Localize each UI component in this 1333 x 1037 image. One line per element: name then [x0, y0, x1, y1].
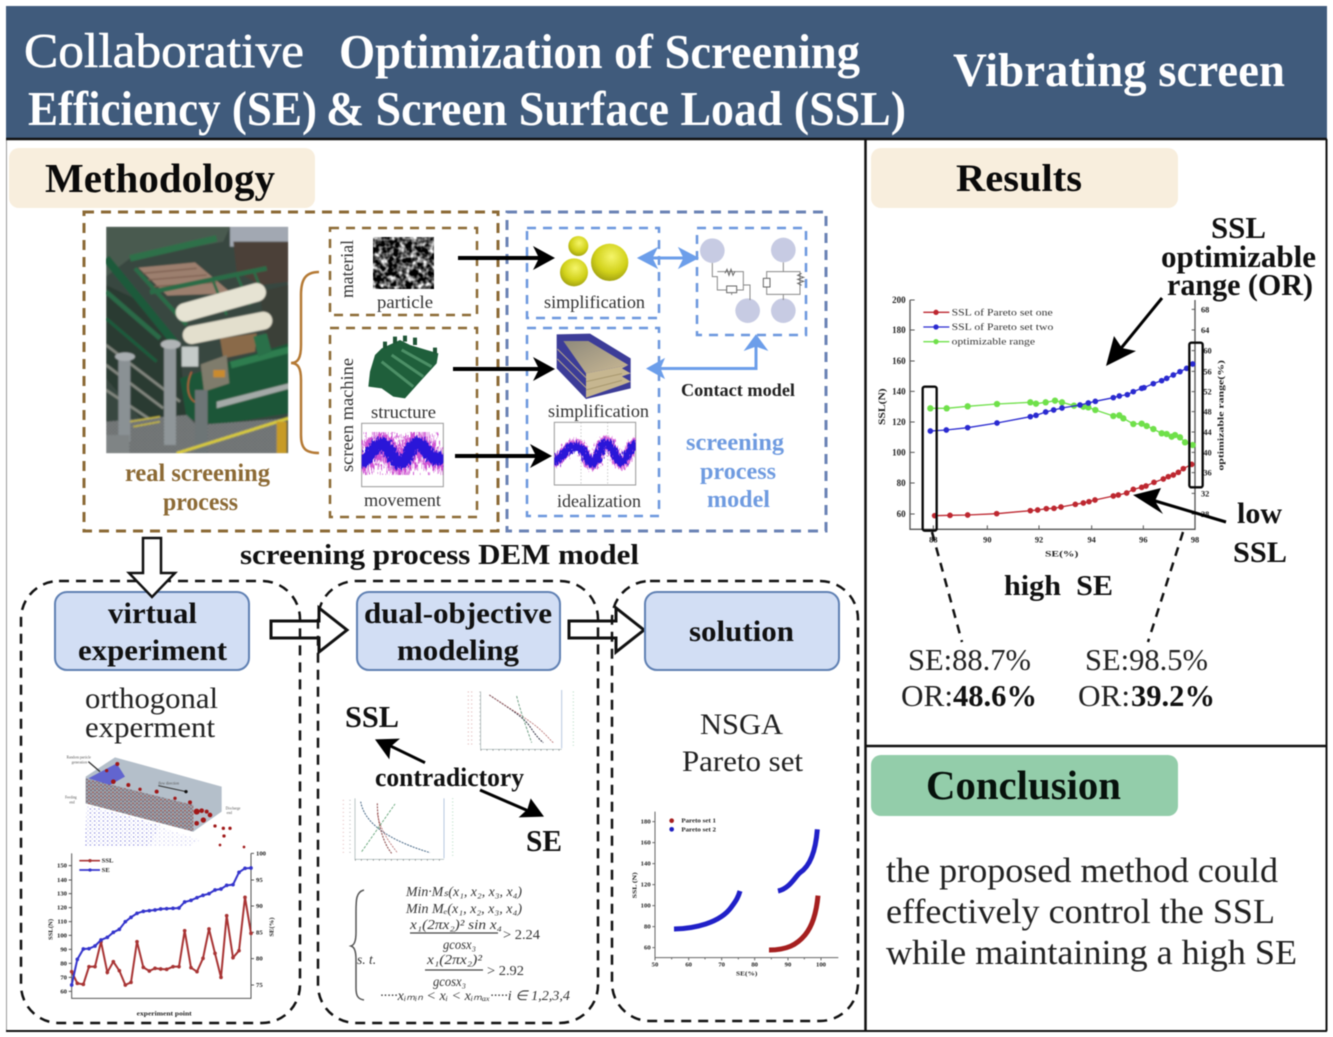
chart: SSL and optimizable range vs SE: 28 [1201, 510, 1209, 519]
heading box: dual-objective modeling: modeling [397, 634, 519, 667]
image: DEM simulation: Feeding [65, 796, 77, 800]
text: conclusion [886, 851, 1297, 972]
box: machine simplification and idealization: idealization [557, 491, 641, 511]
chart: Pareto sets: 80 [644, 924, 651, 931]
chart: SSL and optimizable range vs SE: 32 [1201, 489, 1209, 498]
chart: Pareto sets: 160 [641, 840, 651, 847]
label: contradictory: contradictory [375, 763, 524, 792]
chart: lower trade-off mini plot [343, 798, 453, 860]
arrow: modeling to solution [569, 608, 644, 652]
image: DEM simulation [65, 756, 245, 848]
chart: SSL and optimizable range vs SE: 120 [892, 417, 906, 427]
title: Collaborative [24, 23, 304, 78]
text: NSGA Pareto set: Pareto set [682, 745, 804, 778]
legend [923, 307, 1054, 347]
chart: upper trade-off mini plot [468, 690, 573, 750]
chart: SSL and SE by experiment point: 130 [57, 891, 68, 898]
chart: Pareto sets: SE(%) [736, 971, 757, 978]
text: conclusion: the proposed method could [886, 851, 1279, 890]
box: screen machine: screen machine [337, 358, 357, 472]
header banner [6, 6, 1327, 139]
formula block: Min·Mₛ(x₁, x₂, x₃, x₄) [405, 884, 523, 899]
panel: real screening process [84, 212, 498, 531]
brace [291, 272, 319, 453]
chart: SSL and SE by experiment point: 120 [57, 905, 68, 912]
title [24, 23, 906, 136]
arrow: particle to simplification [458, 246, 555, 270]
text: NSGA Pareto set: NSGA [700, 708, 783, 741]
chart: SSL and SE by experiment point: 80 [60, 960, 68, 967]
panel: dual-objective modeling [318, 581, 598, 1023]
icon: screen decks [557, 334, 631, 399]
chart: movement signal [357, 423, 445, 487]
chart: Pareto sets: SSL (N) [632, 872, 639, 898]
chart: Pareto sets: 90 [785, 962, 792, 969]
divider: right column [866, 139, 1327, 1031]
chart: SSL and optimizable range vs SE: 160 [892, 356, 906, 366]
chart: SSL and optimizable range vs SE [877, 295, 1225, 559]
text: orthogonal experiment: orthogonal [85, 682, 218, 715]
chart: SSL and optimizable range vs SE: 92 [1035, 535, 1043, 544]
chart: SSL and SE by experiment point: experiment point [137, 1010, 193, 1017]
chart: SSL and optimizable range vs SE: 56 [1203, 367, 1212, 376]
chart: Pareto sets: 60 [644, 945, 651, 952]
label: high SE: high SE [1004, 570, 1113, 602]
box: contact model diagram [697, 228, 806, 335]
panel: solution [612, 581, 858, 1021]
chart: SSL and SE by experiment point: 75 [256, 982, 263, 989]
chart: SSL and optimizable range vs SE: SE(%) [1045, 550, 1079, 559]
chart: Pareto sets: 70 [718, 962, 726, 969]
chart: SSL and SE by experiment point: SSL [102, 858, 114, 865]
chart: SSL and optimizable range vs SE: 60 [897, 509, 906, 519]
result values: right [1078, 642, 1215, 713]
callout: SSL optimizable range: range (OR) [1167, 267, 1313, 302]
formula block: Min Mₑ(x₁, x₂, x₃, x₄) [405, 901, 523, 916]
arrow: to low SSL [1133, 488, 1226, 522]
formula block: gcosx₃ [443, 937, 476, 952]
legend: SSL of Pareto set two [952, 322, 1054, 332]
icon: yellow spheres [560, 236, 628, 286]
heading box: solution [645, 592, 839, 670]
chart: SSL and optimizable range vs SE: 44 [1203, 428, 1212, 437]
chart: SSL and SE by experiment point: SSL(N) [47, 919, 54, 940]
heading box: dual-objective modeling: dual-objective [364, 597, 552, 630]
arrow: hollow down [129, 538, 175, 597]
text: conclusion: effectively control the SSL [886, 892, 1275, 931]
label: screening process model: screening [686, 430, 784, 456]
callout: SSL optimizable range [1161, 210, 1316, 302]
arrow: contradictory to SE [480, 790, 544, 817]
box: material [330, 228, 477, 315]
box: machine simplification and idealization: simplification [548, 401, 649, 421]
chart: SSL and SE by experiment point: 140 [57, 877, 68, 884]
highlight boxes [923, 343, 1203, 531]
chart: SSL and SE by experiment point: SE [102, 867, 110, 874]
box: screen machine: structure [371, 402, 436, 422]
chart: SSL and optimizable range vs SE: 98 [1191, 535, 1199, 544]
box: machine simplification and idealization [527, 328, 659, 516]
title: Efficiency (SE) [28, 81, 317, 136]
label: low SSL: low [1237, 497, 1282, 530]
label: contact model: Contact model [681, 380, 795, 400]
chart: Pareto sets: 140 [641, 861, 651, 868]
image: DEM simulation: Discharge [226, 807, 241, 811]
heading: results: Results [956, 157, 1082, 200]
label: SSL objective: SSL [345, 699, 399, 734]
arrow: virtual experiment to modeling [271, 608, 347, 652]
arrow: to optimizable range [1106, 298, 1162, 366]
text: orthogonal experiment [85, 682, 218, 744]
label: real screening process [125, 460, 270, 516]
chart: SSL and SE by experiment point [47, 850, 276, 1017]
chart: idealized signal [550, 422, 640, 485]
chart: SSL and optimizable range vs SE: 40 [1203, 448, 1212, 457]
heading: methodology [9, 148, 315, 208]
chart: SSL and SE by experiment point: 150 [57, 863, 68, 870]
formula block: x₁(2πx₂)² sin x₄ [409, 917, 502, 932]
result values: left: OR: [901, 678, 953, 713]
legend: SSL of Pareto set one [952, 307, 1053, 317]
chart: SSL and optimizable range vs SE: 36 [1203, 469, 1212, 478]
heading: methodology: Methodology [45, 155, 275, 201]
chart: Pareto sets: Pareto set 2 [681, 827, 717, 834]
arrow: contradictory to SSL [375, 739, 425, 763]
heading: conclusion: Conclusion [926, 762, 1121, 808]
title: & Screen Surface Load (SSL) [326, 81, 906, 136]
result values: right: SE:98.5% [1085, 642, 1208, 677]
chart: SSL and SE by experiment point: 110 [57, 919, 68, 926]
arrow: structure to simplification [453, 357, 555, 381]
chart: Pareto sets: 80 [751, 962, 759, 969]
chart: SSL and SE by experiment point: 95 [256, 877, 263, 884]
chart: Pareto sets: 120 [641, 882, 651, 889]
dashed callout lines [932, 532, 1183, 642]
heading box: virtual experiment [55, 592, 249, 670]
chart: Pareto sets: Pareto set 1 [681, 818, 716, 825]
callout: SSL optimizable range: SSL [1211, 210, 1266, 245]
callout: SSL optimizable range: optimizable [1161, 239, 1316, 274]
chart: SSL and optimizable range vs SE: 140 [892, 386, 906, 396]
heading box: solution: solution [689, 615, 794, 648]
label: screening process model [686, 430, 784, 513]
chart: SSL and optimizable range vs SE: 200 [892, 295, 906, 305]
box: screen machine [330, 328, 477, 517]
chart: SSL and optimizable range vs SE: 90 [983, 535, 991, 544]
chart: SSL and SE by experiment point: 60 [60, 988, 68, 995]
chart: Pareto sets: 100 [816, 962, 827, 969]
arrow: blue elbow [647, 335, 767, 378]
formula block [351, 884, 570, 1003]
label: real screening process: process [163, 489, 238, 516]
label: real screening process: real screening [125, 460, 270, 487]
result values: right: 39.2% [1131, 678, 1215, 713]
heading box: dual-objective modeling [357, 592, 560, 670]
label: SE objective: SE [526, 823, 562, 858]
label: screening process DEM model: screening process DEM model [240, 539, 639, 571]
box: particle simplification [527, 228, 659, 318]
chart: SSL and optimizable range vs SE: 48 [1203, 408, 1212, 417]
formula block: gcosx₃ [433, 974, 466, 989]
photo: vibrating screen machine [106, 227, 288, 453]
chart: SSL and SE by experiment point: 100 [256, 850, 267, 857]
chart: SSL and optimizable range vs SE: optimizable range(%) [1216, 360, 1225, 471]
heading: results [871, 148, 1178, 208]
chart: SSL and SE by experiment point: 90 [256, 903, 263, 910]
label: low SSL: SSL [1233, 536, 1287, 569]
header topic: vibrating screen: Vibrating screen [953, 44, 1285, 97]
box: screen machine: movement [364, 490, 441, 510]
chart: SSL and SE by experiment point: 90 [60, 946, 68, 953]
arrow: double blue [638, 248, 698, 268]
chart: SSL and optimizable range vs SE: 52 [1203, 388, 1212, 397]
panel: screening process model [507, 212, 826, 531]
formula block: > 2.24 [503, 927, 540, 942]
image: particle [373, 237, 434, 289]
chart: SSL and SE by experiment point: 80 [256, 956, 263, 963]
chart: Pareto sets: 60 [685, 962, 693, 969]
result values: left: SE:88.7% [908, 642, 1031, 677]
chart: SSL and SE by experiment point: SE(%) [269, 917, 276, 937]
box: material: particle [377, 292, 433, 312]
chart: SSL and optimizable range vs SE: SSL(N) [877, 388, 887, 425]
formula block: x₁(2πx₂)² [426, 952, 483, 967]
chart: SSL and SE by experiment point: 100 [57, 932, 68, 939]
result values: left [901, 642, 1037, 713]
image: DEM simulation: generation [72, 760, 87, 764]
legend: optimizable range [952, 337, 1035, 347]
result values: left: 48.6% [953, 678, 1037, 713]
arrow: movement to idealization [455, 444, 552, 468]
title: Optimization of Screening [339, 24, 860, 79]
chart: SSL and optimizable range vs SE: 180 [892, 325, 906, 335]
chart: SSL and optimizable range vs SE: 64 [1201, 326, 1210, 335]
chart: Pareto sets: 180 [641, 819, 651, 826]
chart: SSL and optimizable range vs SE: 68 [1201, 305, 1209, 314]
image: structure [368, 336, 438, 398]
formula block: ·····xᵢₘᵢₙ < xᵢ < xᵢₘₐₓ·····i ∈ 1,2,3,4 [380, 988, 570, 1003]
chart: SSL and optimizable range vs SE: 100 [892, 447, 906, 457]
formula block: > 2.92 [487, 963, 524, 978]
chart: SSL and optimizable range vs SE: 96 [1139, 535, 1147, 544]
heading box: virtual experiment: virtual [108, 597, 197, 630]
chart: SSL and SE by experiment point: 85 [256, 929, 263, 936]
label: low SSL [1233, 497, 1287, 569]
chart: Pareto sets: 100 [641, 903, 651, 910]
text: NSGA Pareto set [682, 708, 804, 778]
result values: right: OR: [1078, 678, 1130, 713]
image: DEM simulation: end [227, 811, 232, 815]
panel: virtual experiment [21, 581, 300, 1023]
box: particle simplification: simplification [544, 292, 645, 312]
label: screening process model: model [707, 487, 770, 513]
heading box: virtual experiment: experiment [78, 634, 227, 667]
chart: Pareto sets: 50 [652, 962, 659, 969]
formula block: s. t. [357, 952, 376, 967]
image: DEM simulation: Random particle [67, 756, 91, 760]
chart: SSL and SE by experiment point: 70 [60, 974, 68, 981]
text: orthogonal experiment: experment [85, 711, 216, 744]
image: DEM simulation: flow direction [158, 781, 179, 785]
label: screening process model: process [700, 459, 776, 485]
chart: SSL and optimizable range vs SE: 60 [1203, 347, 1212, 356]
chart: Pareto sets [632, 812, 838, 978]
box: material: material [337, 240, 357, 298]
chart: SSL and optimizable range vs SE: 88 [929, 535, 937, 544]
chart: SSL and optimizable range vs SE: 80 [897, 478, 906, 488]
image: DEM simulation: end [69, 801, 75, 805]
chart: SSL and optimizable range vs SE: 94 [1088, 535, 1097, 544]
text: conclusion: while maintaining a high SE [886, 933, 1297, 972]
heading: conclusion [871, 755, 1178, 816]
